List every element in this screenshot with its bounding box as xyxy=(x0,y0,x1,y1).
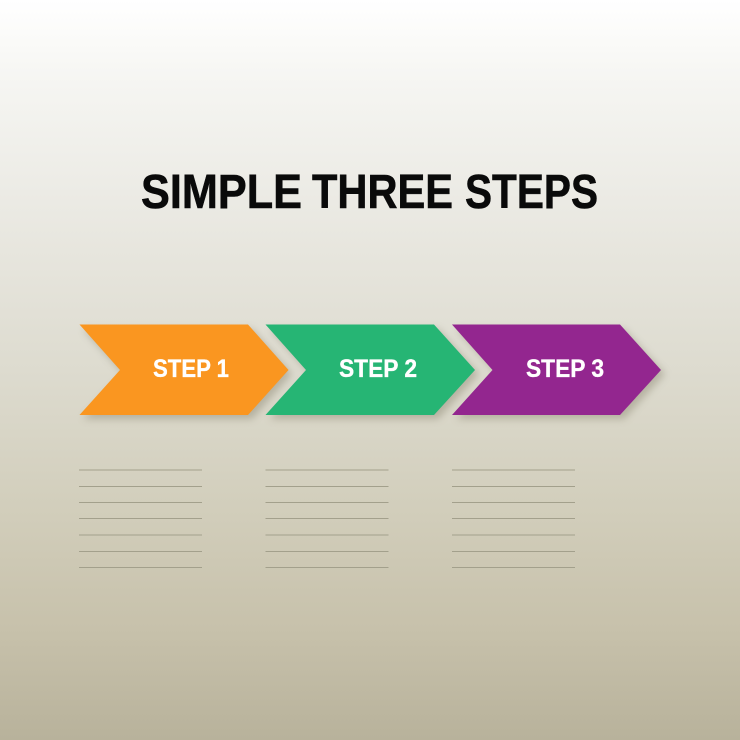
step 3 label: STEP 3 xyxy=(526,355,604,383)
step 2 label: STEP 2 xyxy=(339,355,417,383)
step 3 text lines xyxy=(452,470,575,568)
title xyxy=(141,166,598,219)
step 1 arrow xyxy=(80,324,292,419)
step 1 text lines xyxy=(79,470,202,568)
title: THREE xyxy=(312,166,453,219)
title: STEPS xyxy=(465,166,598,219)
step 1 label: STEP 1 xyxy=(153,355,229,383)
step 2 text lines xyxy=(266,470,388,568)
title: SIMPLE xyxy=(141,166,302,219)
step 2 arrow xyxy=(266,324,479,419)
step 3 arrow xyxy=(452,324,665,419)
